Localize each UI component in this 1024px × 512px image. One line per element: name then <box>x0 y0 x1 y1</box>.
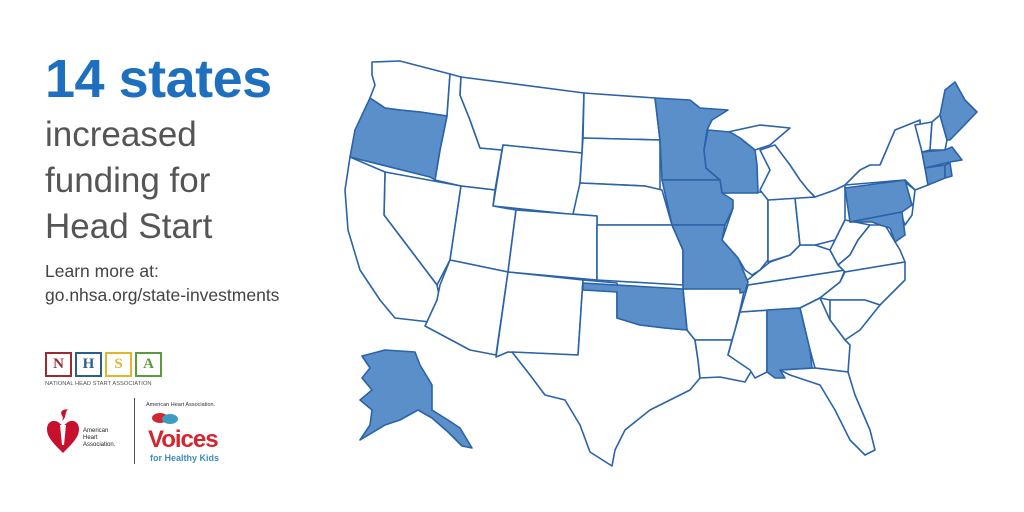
KS <box>597 225 683 285</box>
NY <box>845 120 928 190</box>
AL <box>767 308 812 378</box>
AK <box>360 350 472 448</box>
WY <box>493 145 582 215</box>
learn more text <box>45 261 279 305</box>
SC <box>830 300 880 340</box>
NH <box>930 115 947 150</box>
WI <box>704 130 758 193</box>
subtitle: Head Start <box>45 207 212 246</box>
logo: NHSA: N <box>53 356 64 372</box>
logo: NHSA: H <box>83 356 94 372</box>
logo: Voices for Healthy Kids: Voices <box>148 426 218 453</box>
subtitle <box>45 115 212 246</box>
CO <box>508 210 597 280</box>
logo: Voices for Healthy Kids: for Healthy Kids <box>150 453 219 463</box>
TX <box>512 280 700 466</box>
FL <box>780 368 875 455</box>
learn more text: Learn more at: <box>45 261 159 281</box>
OH <box>795 185 845 245</box>
OR <box>350 98 447 180</box>
VA <box>838 225 905 272</box>
TN <box>740 270 845 312</box>
logo: American Heart Association: American <box>83 428 108 434</box>
logo: NHSA <box>45 352 162 387</box>
logo: Voices for Healthy Kids: American Heart Association. <box>146 402 215 408</box>
logo: American Heart Association <box>47 409 115 453</box>
CA <box>345 157 440 322</box>
UT <box>450 186 516 272</box>
IA <box>662 180 733 225</box>
ID <box>435 74 502 190</box>
WV <box>830 220 870 265</box>
NJ <box>900 182 915 225</box>
NM <box>496 272 583 357</box>
OK <box>583 283 687 330</box>
ME <box>940 82 977 140</box>
IN <box>768 198 800 262</box>
AZ <box>425 260 508 355</box>
logo: NHSA: S <box>114 356 123 372</box>
divider <box>134 398 135 464</box>
title: 14 states <box>45 49 272 109</box>
MD <box>850 212 905 242</box>
MA <box>922 147 962 168</box>
logo: NHSA: A <box>143 356 154 372</box>
GA <box>800 298 850 372</box>
NC <box>820 262 905 305</box>
MI upper <box>728 125 790 150</box>
logo: NHSA: NATIONAL HEAD START ASSOCIATION <box>45 381 152 387</box>
MS <box>728 310 767 378</box>
MI lower <box>760 145 815 200</box>
PA <box>845 180 912 222</box>
logo: American Heart Association: Heart <box>83 435 98 441</box>
logo: American Heart Association: Association. <box>83 442 115 448</box>
NV <box>384 172 461 285</box>
KY <box>745 245 845 285</box>
IL <box>722 192 768 275</box>
RI <box>945 163 952 178</box>
MN <box>655 98 728 180</box>
NE <box>573 183 672 225</box>
ND <box>583 93 660 140</box>
VT <box>915 122 932 152</box>
learn more text: go.nhsa.org/state-investments <box>45 285 279 305</box>
CT <box>925 165 945 185</box>
AR <box>683 287 745 340</box>
WA <box>370 61 450 116</box>
SD <box>580 138 660 190</box>
LA <box>695 340 752 382</box>
subtitle: increased <box>45 115 197 154</box>
subtitle: funding for <box>45 161 210 200</box>
MT <box>460 77 584 153</box>
highlighted states <box>350 82 977 448</box>
MO <box>672 225 748 293</box>
logo: Voices for Healthy Kids <box>146 402 219 463</box>
